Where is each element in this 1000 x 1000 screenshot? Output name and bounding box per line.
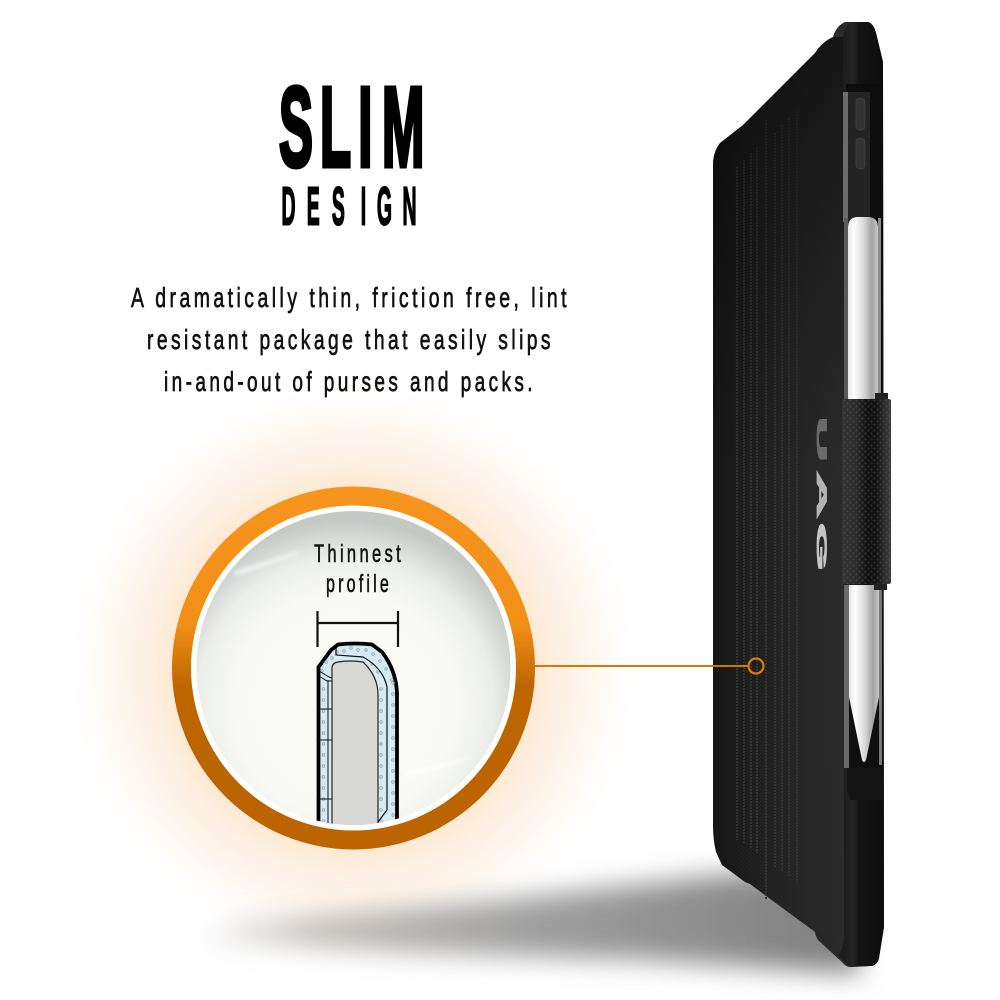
stylus upper section	[848, 217, 878, 400]
cross-section outer shell	[318, 644, 397, 830]
cross-section inner device	[332, 661, 378, 830]
volume button upper	[856, 98, 865, 130]
callout leader line	[530, 658, 764, 674]
cross-section cell dots	[320, 680, 396, 830]
magnifier circle	[172, 486, 535, 850]
lens background	[196, 511, 510, 825]
case cross-section diagram	[318, 644, 397, 830]
cross-section middle wall	[336, 648, 387, 822]
tablet ground shadow	[200, 872, 860, 974]
label: profile: profile	[326, 570, 392, 598]
lower black corner gloss	[847, 768, 883, 800]
lens contents	[234, 552, 399, 825]
right edge highlight	[878, 218, 881, 398]
cross-section top cell dots	[321, 647, 393, 681]
description line 1: A dramatically thin, friction free, lint	[131, 282, 570, 313]
cross-section hinge lines	[318, 671, 332, 830]
UAG logo	[814, 417, 829, 571]
description text block	[131, 282, 570, 397]
stylus channel left strip	[844, 218, 848, 400]
infographic canvas	[97, 22, 891, 991]
subtitle: DESIGN: DESIGN	[282, 175, 417, 236]
title: SLIM: SLIM	[279, 64, 424, 191]
cover top shading	[713, 37, 843, 480]
stylus lower section and tip	[849, 585, 879, 762]
cover weave texture	[735, 40, 843, 945]
right spine of case	[838, 22, 884, 967]
lens glare top left	[234, 552, 296, 576]
tablet case product image	[713, 22, 891, 967]
description line 2: resistant package that easily slips	[147, 324, 554, 355]
white inner ring	[191, 506, 516, 830]
orange ring	[172, 486, 535, 850]
tablet body silhouette	[713, 22, 884, 967]
lower channel strips	[844, 585, 882, 770]
lens glare bottom right	[400, 757, 468, 777]
orange glow behind magnifier	[63, 378, 643, 958]
button slot	[843, 84, 881, 222]
callout target ring	[748, 658, 764, 674]
cover ribbed stripes	[737, 111, 797, 900]
elastic pencil band	[842, 393, 891, 590]
volume button lower	[856, 138, 865, 169]
logo letter U: U	[814, 417, 829, 461]
logo letter G: G	[814, 523, 829, 571]
logo letter A: A	[814, 471, 829, 519]
label: Thinnest: Thinnest	[314, 540, 404, 568]
description line 3: in-and-out of purses and packs.	[164, 366, 536, 397]
profile dimension bracket	[318, 611, 398, 647]
